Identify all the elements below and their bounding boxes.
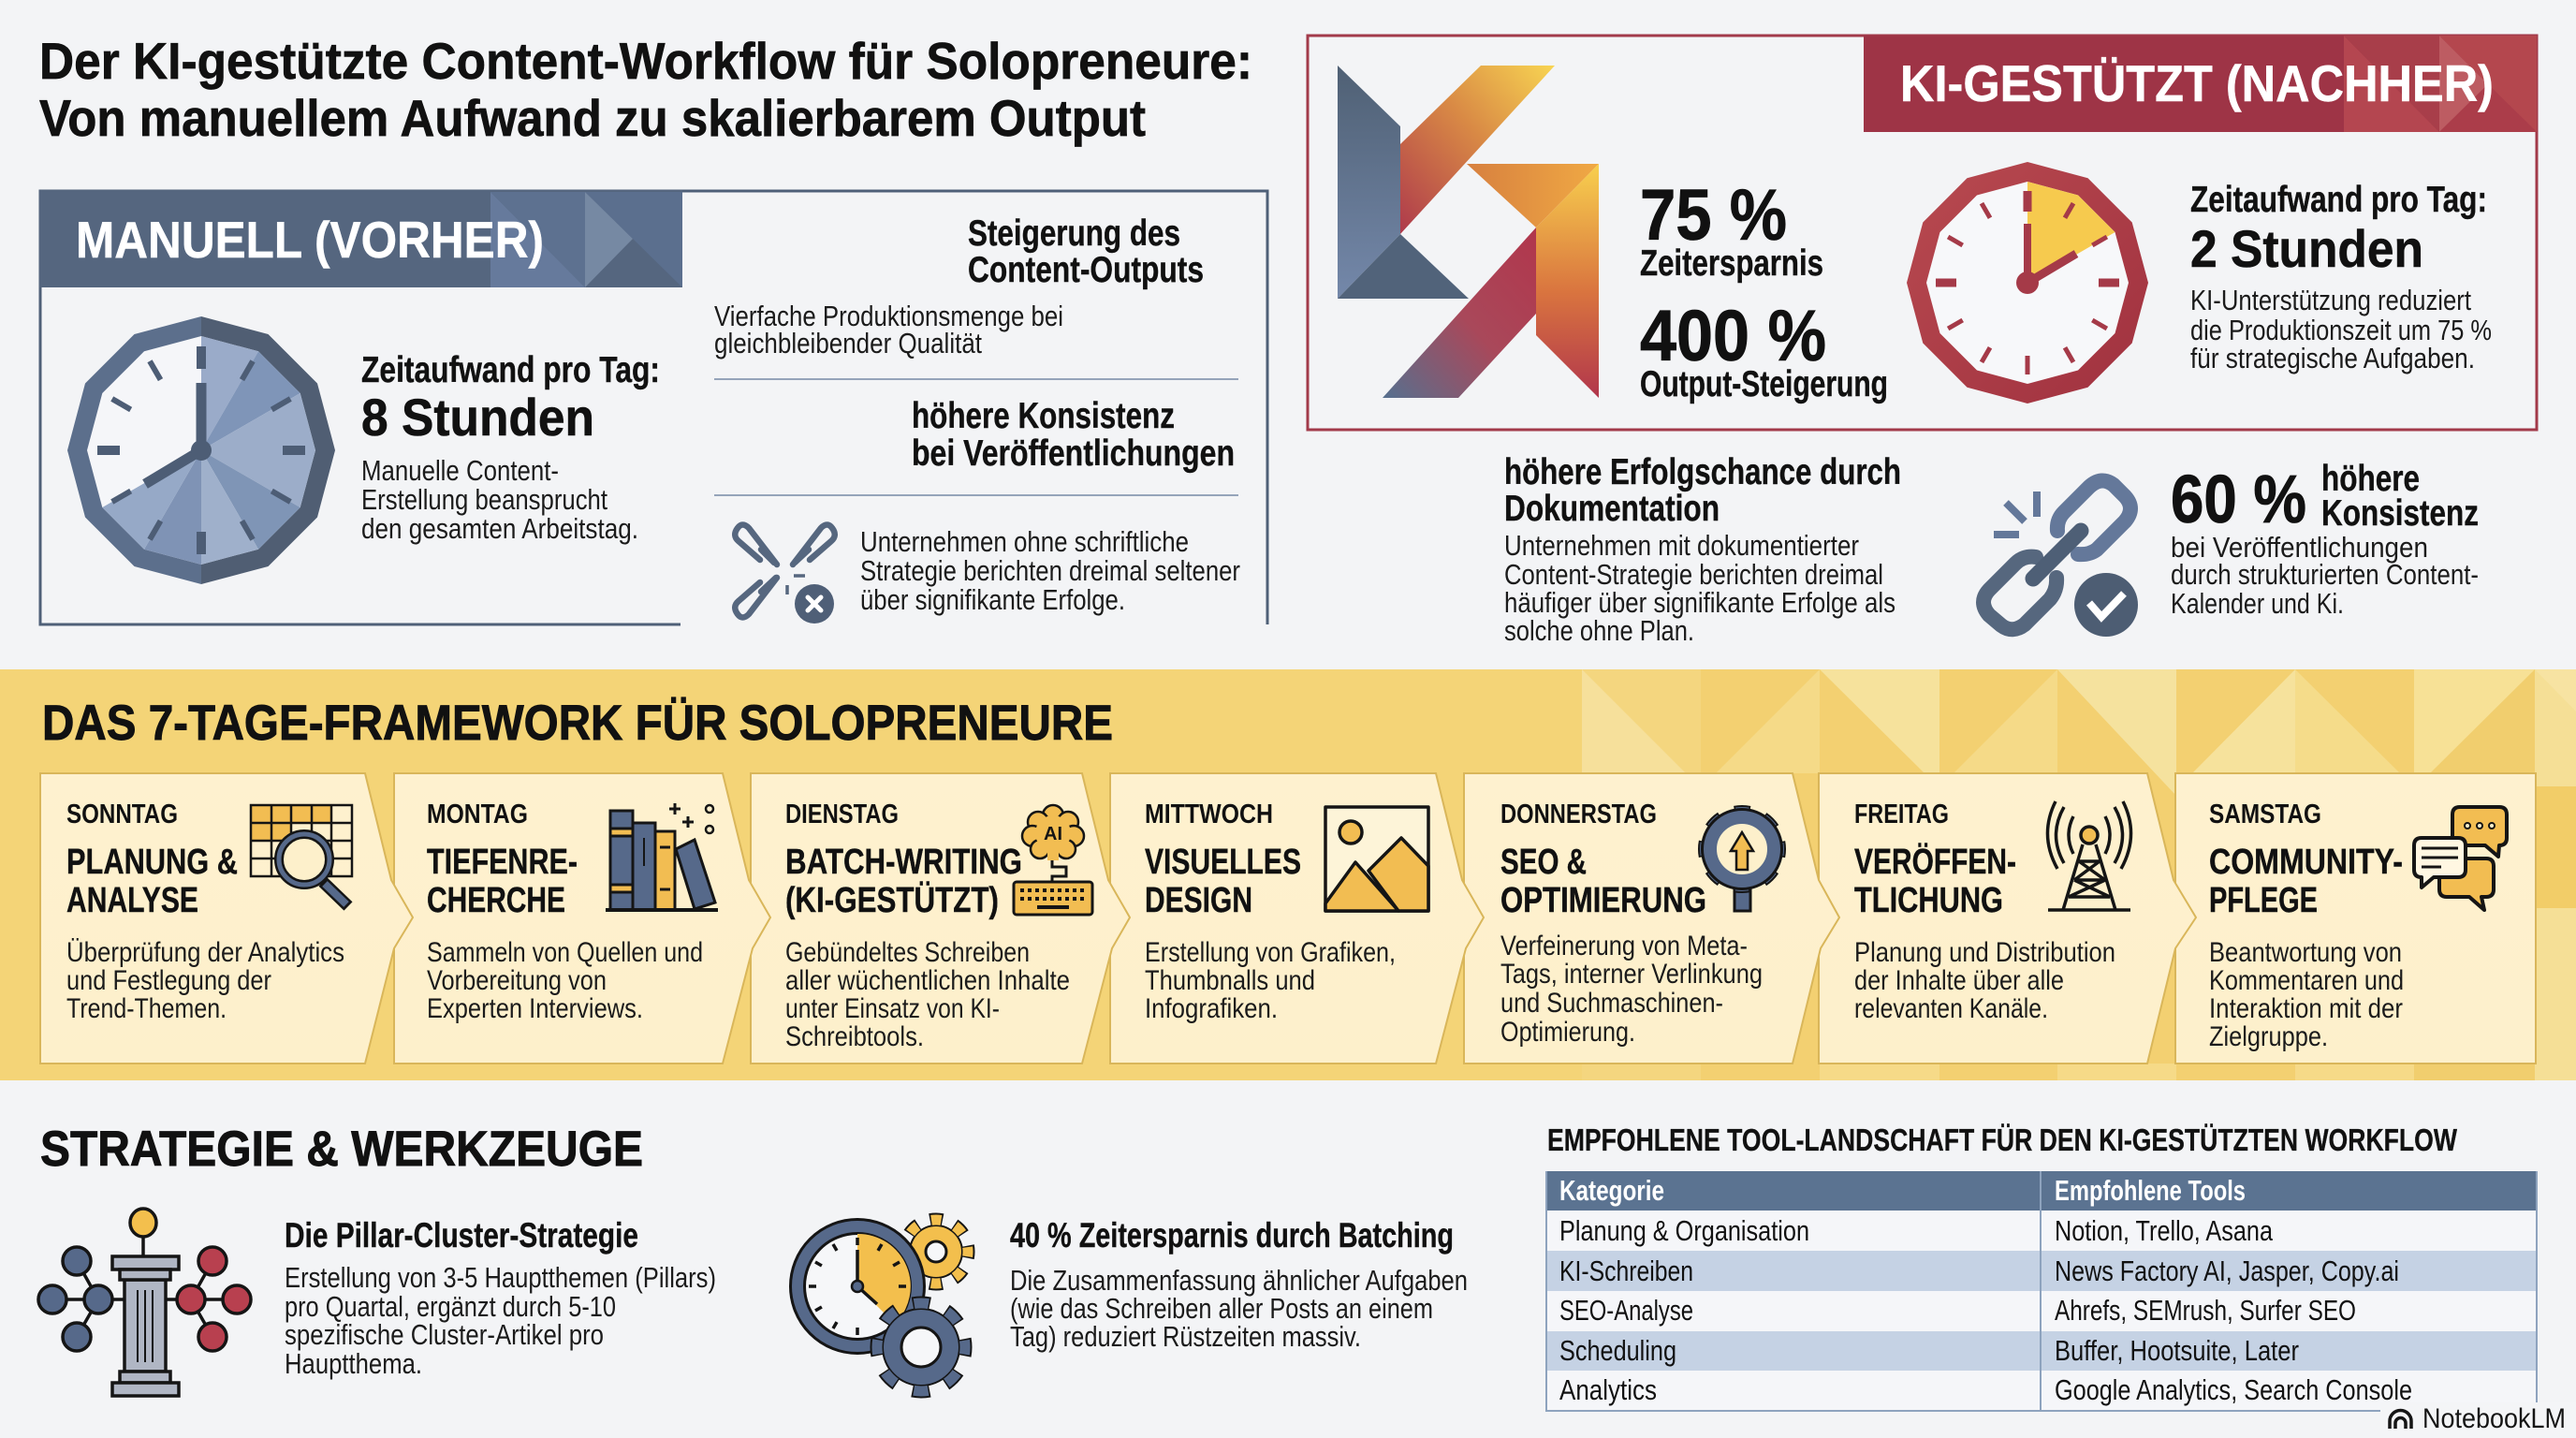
card: mittwoch: MITTWOCH [1145, 800, 1273, 829]
table row: scheduling [1559, 1334, 2299, 1367]
card: samstag: Zielgruppe. [2209, 1021, 2328, 1052]
card: sonntag: Trend-Themen. [66, 993, 227, 1024]
text: batching: Tag) reduziert Rüstzeiten massiv. [1010, 1320, 1361, 1353]
card: montag: MONTAG [427, 800, 528, 829]
text: manual time: Zeitaufwand pro Tag: [361, 350, 660, 390]
text: pillar-cluster-strategie: Erstellung von 3-5 Hauptthemen (Pillars) [285, 1261, 716, 1294]
card: freitag: relevanten Kanäle. [1854, 993, 2048, 1024]
text: manual time: Erstellung beansprucht [361, 483, 607, 516]
text: konsistenz [912, 396, 1235, 474]
stat: 60 %: durch strukturierten Content- [2171, 558, 2479, 591]
title: Der KI-gestützte Content-Workflow für Solopreneure: [39, 32, 1252, 90]
text: ai time: Zeitaufwand pro Tag: [2190, 180, 2487, 220]
text: erfolgschance: Content-Strategie berichten dreimal [1504, 558, 1883, 591]
card: freitag: Planung und Distribution [1854, 937, 2115, 968]
heading: framework: DAS 7-TAGE-FRAMEWORK FÜR SOLOPRENEURE [42, 696, 1113, 751]
icon: pillar cluster [38, 1209, 251, 1396]
stat: 60 %: höhere [2321, 459, 2420, 499]
card: sonntag: SONNTAG [66, 800, 178, 829]
icon: seo gear [1705, 812, 1779, 911]
text: ai time: die Produktionszeit um 75 % [2190, 314, 2492, 346]
text: manual time: den gesamten Arbeitstag. [361, 512, 638, 545]
card: dienstag: unter Einsatz von KI- [785, 993, 1000, 1024]
card: freitag: der Inhalte über alle [1854, 965, 2064, 996]
icon: image [1325, 807, 1428, 911]
text: pillar-cluster-strategie [285, 1216, 716, 1380]
table row: planung: Notion, Trello, Asana [2055, 1214, 2274, 1247]
text: manual time [361, 350, 660, 545]
text: manual time: 8 Stunden [361, 388, 594, 447]
panel: manuell (vorher) [39, 190, 1267, 624]
card: montag: TIEFENRE- [427, 843, 578, 882]
table row: ki-schreiben: KI-Schreiben [1559, 1255, 1693, 1287]
text: steigerung [714, 213, 1204, 360]
text: erfolgschance [1504, 452, 1901, 647]
stat: 75 %: 75 % [1640, 175, 1787, 256]
card: sonntag: PLANUNG & [66, 843, 238, 882]
card: freitag: VERÖFFEN- [1854, 842, 2016, 882]
text: batching [1010, 1216, 1468, 1353]
text: erfolgschance: Unternehmen mit dokumentierter [1504, 529, 1859, 562]
card: dienstag: DIENSTAG [785, 800, 899, 829]
card: dienstag: aller wüchentlichen Inhalte [785, 965, 1070, 996]
card: donnerstag: Tags, interner Verlinkung [1500, 959, 1763, 990]
card: dienstag: Schreibtools. [785, 1021, 924, 1052]
table header: Kategorie [1559, 1174, 1664, 1207]
text: erfolgschance: höhere Erfolgschance durch [1504, 452, 1901, 492]
header: ki-gestützt [1864, 36, 2537, 132]
text: konsistenz: höhere Konsistenz [912, 396, 1175, 436]
card: freitag: TLICHUNG [1854, 881, 2003, 920]
stat: 75 %: Zeitersparnis [1640, 243, 1823, 284]
card: donnerstag: Optimierung. [1500, 1017, 1635, 1048]
card: montag: Sammeln von Quellen und [427, 937, 703, 968]
card: donnerstag [1464, 773, 1839, 1064]
text: steigerung: gleichbleibender Qualität [714, 327, 982, 360]
card: dienstag: Gebündeltes Schreiben [785, 937, 1030, 968]
text: steigerung: Vierfache Produktionsmenge bei [714, 300, 1063, 332]
table: tools [1546, 1171, 2537, 1411]
card: donnerstag: DONNERSTAG [1500, 800, 1657, 829]
icon: chat bubbles [2414, 807, 2507, 910]
panel: ki-gestützt (nachher) [1308, 36, 2537, 430]
card: mittwoch: DESIGN [1145, 881, 1252, 920]
icon: batching clock and gears [798, 1220, 968, 1391]
card: donnerstag: Verfeinerung von Meta- [1500, 931, 1748, 961]
header: manuell [39, 190, 682, 287]
card: samstag: SAMSTAG [2209, 800, 2321, 829]
text: pillar-cluster-strategie: Hauptthema. [285, 1347, 422, 1380]
icon: geometric logo [1338, 66, 1599, 398]
text: steigerung: Steigerung des [968, 213, 1180, 254]
table row: scheduling: Scheduling [1559, 1334, 1676, 1367]
text: pillar-cluster-strategie: Die Pillar-Cluster-Strategie [285, 1216, 638, 1255]
card: sonntag [40, 773, 413, 1064]
card: mittwoch [1110, 773, 1484, 1064]
card: freitag: FREITAG [1854, 800, 1949, 829]
stat: 60 %: Kalender und Ki. [2171, 587, 2344, 620]
text: erfolgschance: Dokumentation [1504, 489, 1720, 529]
card: samstag: Beantwortung von [2209, 937, 2402, 968]
card: samstag: Interaktion mit der [2209, 993, 2403, 1024]
text: steigerung: Content-Outputs [968, 250, 1204, 290]
text: ohne strategie [860, 525, 1240, 616]
table row: analytics: Google Analytics, Search Console [2055, 1373, 2412, 1406]
card: montag [394, 773, 770, 1064]
stat: 400 %: 400 % [1640, 296, 1826, 376]
icon: broadcast tower [2047, 801, 2131, 910]
text: konsistenz: bei Veröffentlichungen [912, 433, 1235, 474]
text: ohne strategie: Strategie berichten dreimal seltener [860, 554, 1240, 587]
title [39, 32, 1252, 147]
table row: planung [1559, 1214, 2274, 1247]
card: montag: Experten Interviews. [427, 993, 643, 1024]
table header: Empfohlene Tools [2055, 1174, 2246, 1207]
table row: ki-schreiben: News Factory AI, Jasper, Copy.ai [2055, 1255, 2399, 1287]
header: ki-gestützt: KI-GESTÜTZT (NACHHER) [1900, 54, 2494, 112]
table row: analytics [1559, 1373, 2412, 1406]
icon: ai clock [1907, 162, 2148, 404]
text: ai time: KI-Unterstützung reduziert [2190, 284, 2471, 316]
card: sonntag: ANALYSE [66, 881, 198, 920]
text: batching: Die Zusammenfassung ähnlicher Aufgaben [1010, 1264, 1468, 1297]
icon: manual clock [67, 316, 335, 584]
panel: 7-tage-framework band [0, 669, 2576, 1080]
card: montag: Vorbereitung von [427, 965, 607, 996]
text: ai time: für strategische Aufgaben. [2190, 342, 2475, 374]
card: sonntag: Überprüfung der Analytics [66, 937, 344, 968]
card: donnerstag: und Suchmaschinen- [1500, 988, 1723, 1019]
table row: seo-analyse: SEO-Analyse [1559, 1294, 1693, 1327]
card: dienstag: (KI-GESTÜTZT) [785, 880, 999, 920]
stat: 60 %: Konsistenz [2321, 493, 2479, 534]
stat: 60 %: 60 % [2171, 462, 2306, 537]
card: samstag [2175, 773, 2536, 1064]
card: samstag: COMMUNITY- [2209, 843, 2403, 882]
card: dienstag: BATCH-WRITING [785, 843, 1022, 882]
icon: connected chain with check [1983, 480, 2138, 637]
table header [1559, 1174, 2246, 1207]
icon: books [606, 803, 718, 910]
table row: planung: Planung & Organisation [1559, 1214, 1809, 1247]
card: samstag: Kommentaren und [2209, 965, 2404, 996]
stat: 400 %: Output-Steigerung [1640, 364, 1888, 404]
text: ohne strategie: über signifikante Erfolge. [860, 583, 1125, 616]
card: mittwoch: Erstellung von Grafiken, [1145, 937, 1396, 968]
table row: seo-analyse: Ahrefs, SEMrush, Surfer SEO [2055, 1294, 2356, 1327]
notebooklm badge [2380, 1402, 2576, 1438]
icon: ai brain and keyboard: AI [1044, 824, 1062, 844]
icon: broken chain [735, 524, 835, 624]
card: donnerstag: OPTIMIERUNG [1500, 881, 1706, 920]
text: erfolgschance: solche ohne Plan. [1504, 614, 1694, 647]
text: batching: (wie das Schreiben aller Posts an einem [1010, 1292, 1433, 1325]
stat: 400 % [1640, 296, 1888, 404]
text: batching: 40 % Zeitersparnis durch Batching [1010, 1216, 1454, 1255]
text: erfolgschance: häufiger über signifikante Erfolge als [1504, 586, 1895, 619]
table row: seo-analyse [1559, 1294, 2356, 1327]
text: ai time [2190, 180, 2492, 374]
icon: ai brain and keyboard [1014, 805, 1092, 915]
card: mittwoch: Thumbnalls und [1145, 965, 1315, 996]
card: donnerstag: SEO & [1500, 843, 1587, 882]
stat: 75 % [1640, 175, 1823, 284]
text: pillar-cluster-strategie: spezifische Cluster-Artikel pro [285, 1318, 604, 1351]
text: ohne strategie: Unternehmen ohne schriftliche [860, 525, 1189, 558]
table row: scheduling: Buffer, Hootsuite, Later [2055, 1334, 2299, 1367]
card: sonntag: und Festlegung der [66, 965, 271, 996]
card: mittwoch: VISUELLES [1145, 843, 1301, 882]
table row: ki-schreiben [1559, 1255, 2399, 1287]
card: mittwoch: Infografiken. [1145, 993, 1278, 1024]
card: dienstag [751, 773, 1130, 1064]
stat: 60 % [2171, 459, 2479, 620]
heading: strategie & werkzeuge: STRATEGIE & WERKZEUGE [40, 1122, 643, 1177]
text: manual time: Manuelle Content- [361, 454, 559, 487]
text: pillar-cluster-strategie: pro Quartal, ergänzt durch 5-10 [285, 1290, 616, 1323]
card: freitag [1819, 773, 2196, 1064]
text: ai time: 2 Stunden [2190, 219, 2423, 278]
table row: analytics: Analytics [1559, 1373, 1657, 1406]
icon: calendar with magnifier [251, 805, 352, 906]
title: Von manuellem Aufwand zu skalierbarem Output [39, 89, 1146, 147]
stat: 60 %: bei Veröffentlichungen [2171, 531, 2428, 564]
card: samstag: PFLEGE [2209, 881, 2318, 920]
card: montag: CHERCHE [427, 881, 565, 920]
header: manuell: MANUELL (VORHER) [76, 211, 544, 269]
